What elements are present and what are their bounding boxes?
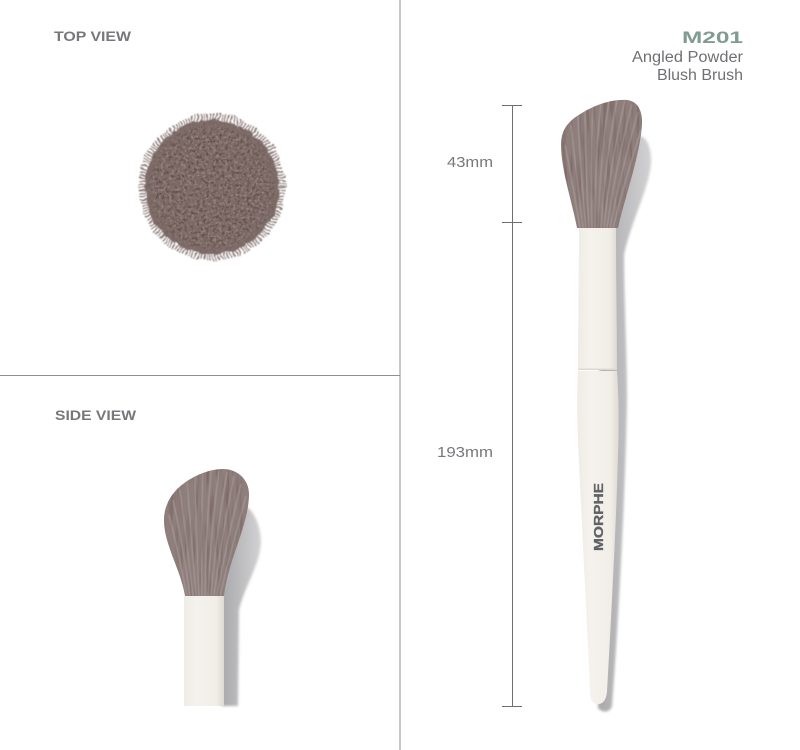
handle brand: MORPHE bbox=[592, 483, 606, 551]
product code: M201 bbox=[682, 28, 743, 47]
handle join bbox=[578, 368, 617, 370]
product name: Angled Powder bbox=[632, 49, 743, 66]
dimension scale bbox=[502, 105, 522, 706]
full brush lower handle bbox=[577, 371, 619, 704]
full brush bbox=[556, 96, 651, 712]
puff outer spikes bbox=[142, 117, 282, 257]
product title block: Blush Brush bbox=[657, 67, 743, 84]
brush top view: round bristle puff bbox=[142, 117, 282, 257]
full brush upper handle bbox=[578, 228, 617, 369]
full brush shadow bbox=[598, 136, 651, 712]
product title block bbox=[632, 28, 743, 84]
side view bristles bbox=[164, 469, 249, 596]
panel dividers bbox=[0, 0, 400, 750]
full brush bristles bbox=[561, 100, 642, 228]
heading: top view: TOP VIEW bbox=[54, 28, 132, 44]
side view shadow bbox=[222, 505, 261, 706]
brush side view bbox=[160, 465, 261, 706]
side view handle bbox=[184, 596, 224, 706]
puff inner texture bbox=[143, 118, 281, 256]
label: bristle length: 43mm bbox=[447, 154, 493, 171]
label: total handle length: 193mm bbox=[437, 444, 493, 461]
heading: side view: SIDE VIEW bbox=[55, 407, 137, 423]
